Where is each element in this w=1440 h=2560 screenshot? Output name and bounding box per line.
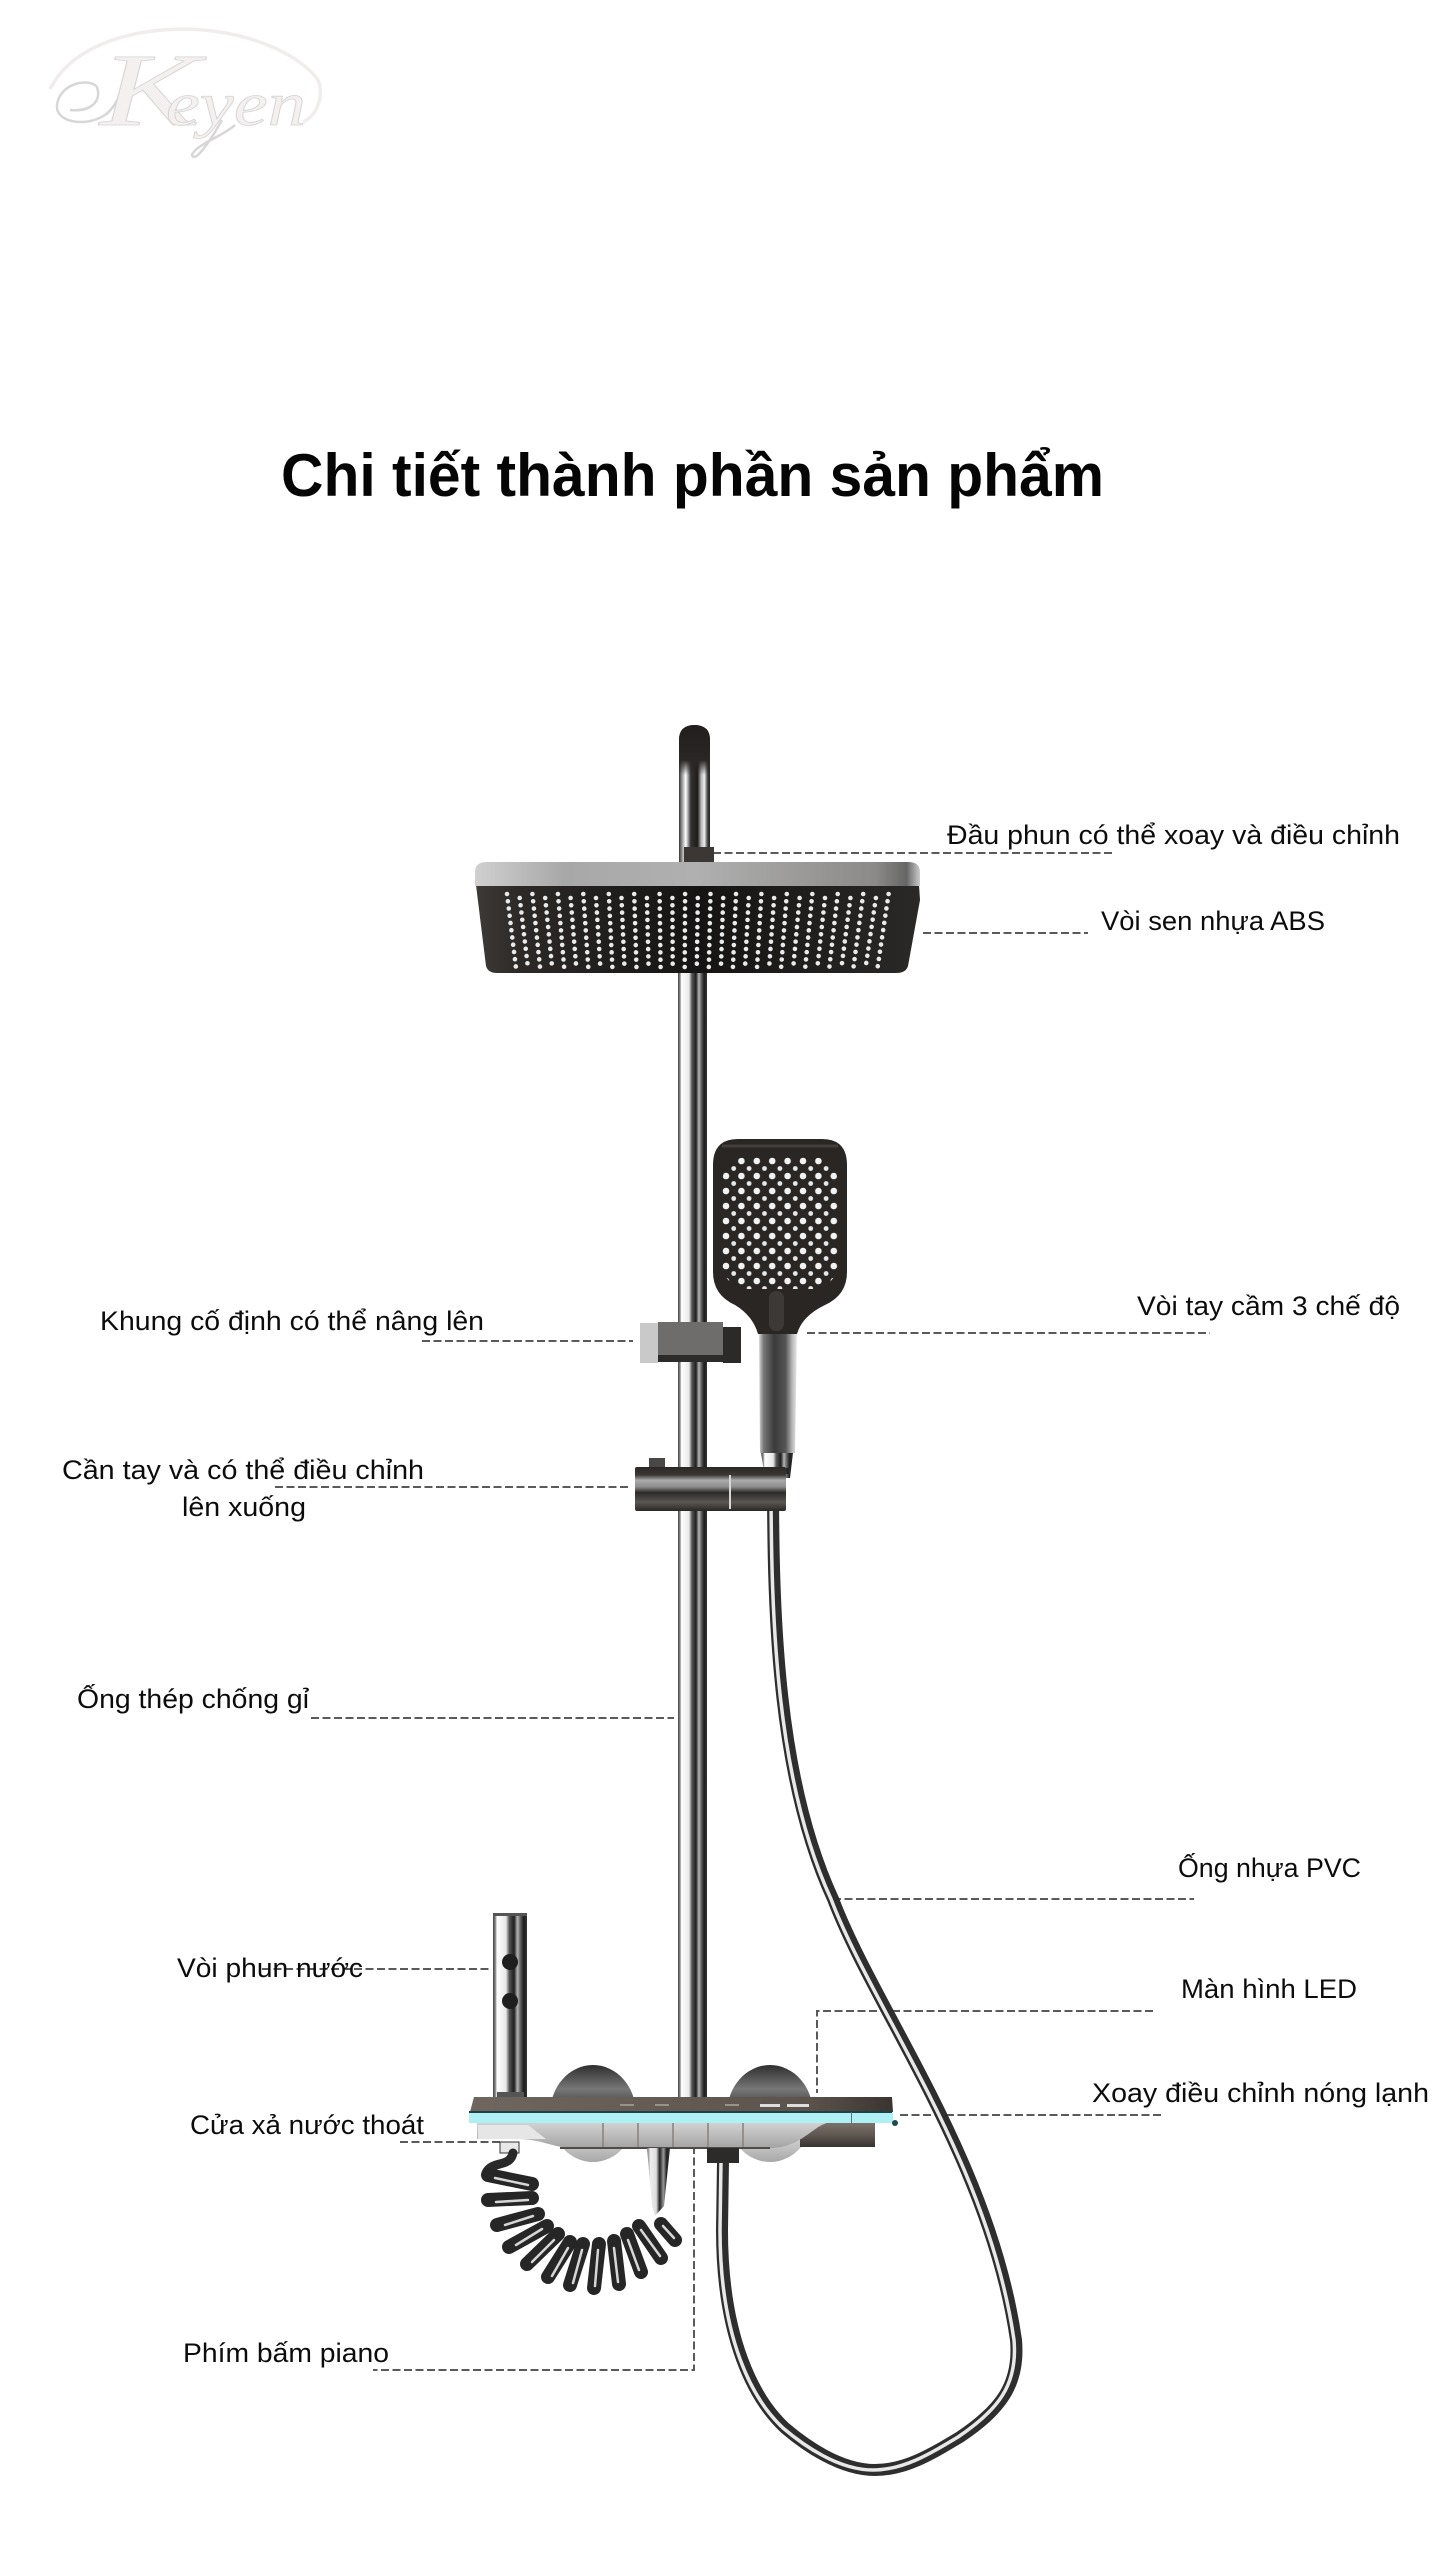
label: adjustable arm line two: lên xuống	[182, 1492, 306, 1522]
label: sprayer: Vòi phun nước	[177, 1953, 363, 1983]
label: LED screen: Màn hình LED	[1181, 1974, 1357, 2004]
temperature knobs	[550, 2065, 813, 2162]
rain shower head	[475, 862, 920, 973]
label: hot-cold dial: Xoay điều chỉnh nóng lạnh	[1092, 2078, 1429, 2108]
LED light strip	[469, 2111, 898, 2126]
top deck	[470, 2097, 893, 2112]
logo letters eyen: eyen	[166, 71, 306, 139]
right cylinder	[800, 2123, 875, 2147]
PVC hose	[720, 1480, 1017, 2470]
valve body	[469, 2065, 898, 2162]
shower arm	[679, 725, 714, 863]
adjustable slider arm	[635, 1458, 790, 1511]
hand shower	[713, 1139, 847, 1478]
callout leader lines	[262, 853, 1210, 2370]
label: piano keys: Phím bấm piano	[183, 2338, 389, 2368]
piano key panel	[477, 2123, 827, 2149]
logo letter K: K	[97, 33, 207, 148]
callout labels	[62, 820, 1429, 2368]
logo: Keyen	[50, 29, 320, 157]
fixed lifting frame	[640, 1322, 741, 1363]
label: fixed frame: Khung cố định có thể nâng lên	[100, 1306, 484, 1336]
title: Chi tiết thành phần sản phẩm	[281, 442, 1104, 509]
nozzle dots	[507, 894, 889, 968]
steel riser tube	[678, 970, 707, 2105]
label: ABS shower: Vòi sen nhựa ABS	[1101, 906, 1325, 936]
label: handheld shower: Vòi tay cầm 3 chế độ	[1137, 1291, 1400, 1321]
label: adjustable arm: Cần tay và có thể điều chỉnh	[62, 1455, 424, 1485]
gooseneck fitting	[647, 2148, 670, 2216]
label: steel tube: Ống thép chống gỉ	[77, 1682, 309, 1714]
coiled spring hose	[486, 2142, 675, 2288]
label: spray head: Đầu phun có thể xoay và điều chỉnh	[947, 820, 1400, 850]
hose connector	[707, 2148, 739, 2163]
label: PVC hose: Ống nhựa PVC	[1178, 1851, 1361, 1883]
label: drain outlet: Cửa xả nước thoát	[190, 2110, 425, 2140]
sprayer wand	[493, 1913, 527, 2104]
